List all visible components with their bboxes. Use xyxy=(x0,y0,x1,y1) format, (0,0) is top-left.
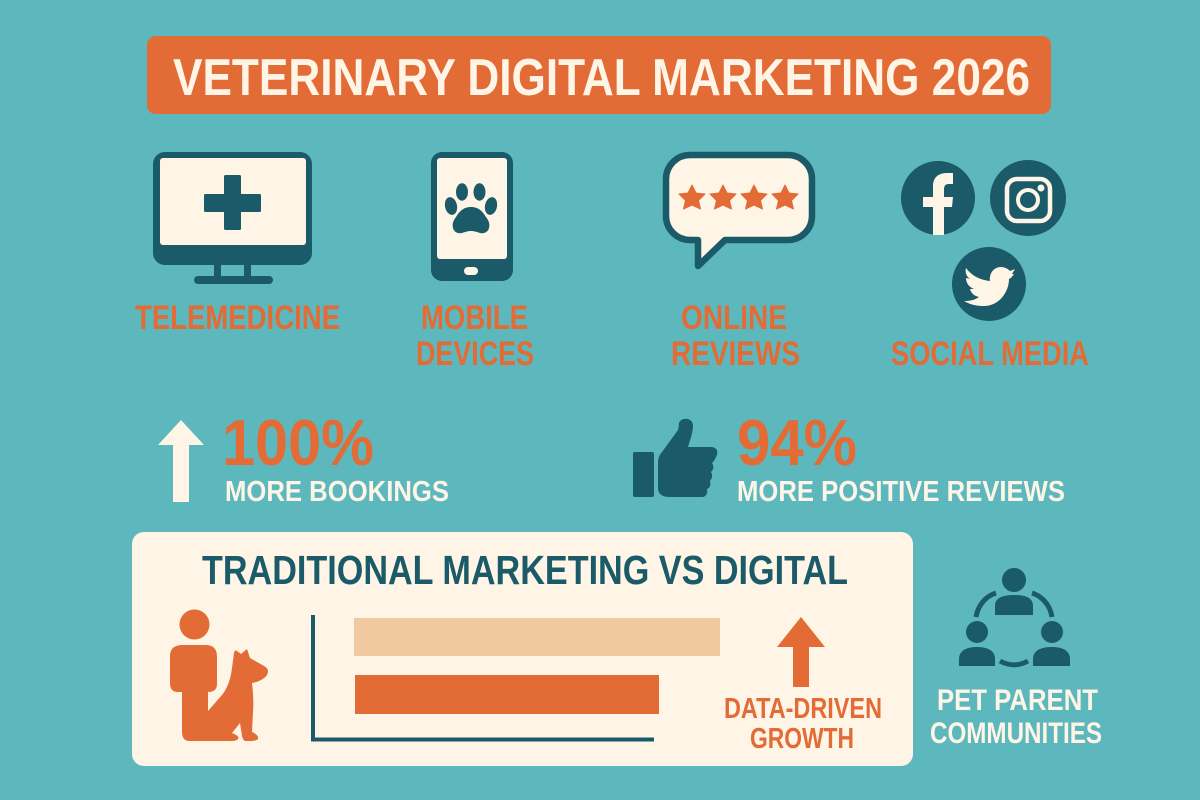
label: more positive reviews: MORE POSITIVE REVIEWS xyxy=(737,476,1065,508)
axes xyxy=(313,615,654,740)
label: pet parent communities: COMMUNITIES xyxy=(930,717,1102,750)
label: social media: SOCIAL MEDIA xyxy=(891,335,1089,373)
icon: phone with paw xyxy=(431,152,513,281)
icon: growth arrow xyxy=(777,617,825,687)
label: mobile devices: DEVICES xyxy=(416,335,534,373)
label: data-driven growth xyxy=(724,693,882,755)
panel: mobile devices xyxy=(416,152,534,373)
title xyxy=(147,36,1051,114)
heading: TRADITIONAL MARKETING VS DIGITAL xyxy=(202,547,848,593)
panel: telemedicine xyxy=(135,152,340,337)
label: online reviews: ONLINE xyxy=(681,299,787,337)
panel: social media xyxy=(891,160,1089,373)
bar: digital xyxy=(355,675,659,714)
label: telemedicine: TELEMEDICINE xyxy=(135,299,340,337)
panel: online reviews xyxy=(666,155,812,373)
bar chart xyxy=(313,615,720,740)
icon: community circle xyxy=(959,568,1070,666)
icon: speech bubble with stars xyxy=(666,155,812,266)
icon: monitor with medical cross xyxy=(153,152,312,284)
label: more bookings: MORE BOOKINGS xyxy=(225,476,449,508)
label: mobile devices xyxy=(416,299,534,373)
icon: instagram xyxy=(990,160,1066,236)
label: online reviews: REVIEWS xyxy=(671,335,800,373)
figure: 100%: 100% xyxy=(222,406,374,479)
label: mobile devices: MOBILE xyxy=(421,299,528,337)
bar: traditional xyxy=(354,618,720,656)
label: data-driven growth: GROWTH xyxy=(750,723,854,755)
label: online reviews xyxy=(671,299,800,373)
icon: facebook xyxy=(901,161,975,235)
icon: up arrow xyxy=(158,420,204,502)
label: pet parent communities: PET PARENT xyxy=(937,684,1098,717)
stat: 100% more bookings xyxy=(158,406,449,508)
icon: twitter xyxy=(952,247,1026,321)
label: data-driven growth: DATA-DRIVEN xyxy=(724,693,882,725)
panel: traditional marketing vs digital xyxy=(132,532,913,766)
icon: person with dog xyxy=(170,610,268,741)
figure: 94%: 94% xyxy=(737,406,857,479)
title: VETERINARY DIGITAL MARKETING 2026 xyxy=(173,49,1030,107)
label: pet parent communities xyxy=(930,684,1102,750)
stat: 94% more positive reviews xyxy=(633,406,1065,508)
icon: thumbs up xyxy=(633,419,717,497)
panel: pet parent communities xyxy=(930,568,1102,750)
